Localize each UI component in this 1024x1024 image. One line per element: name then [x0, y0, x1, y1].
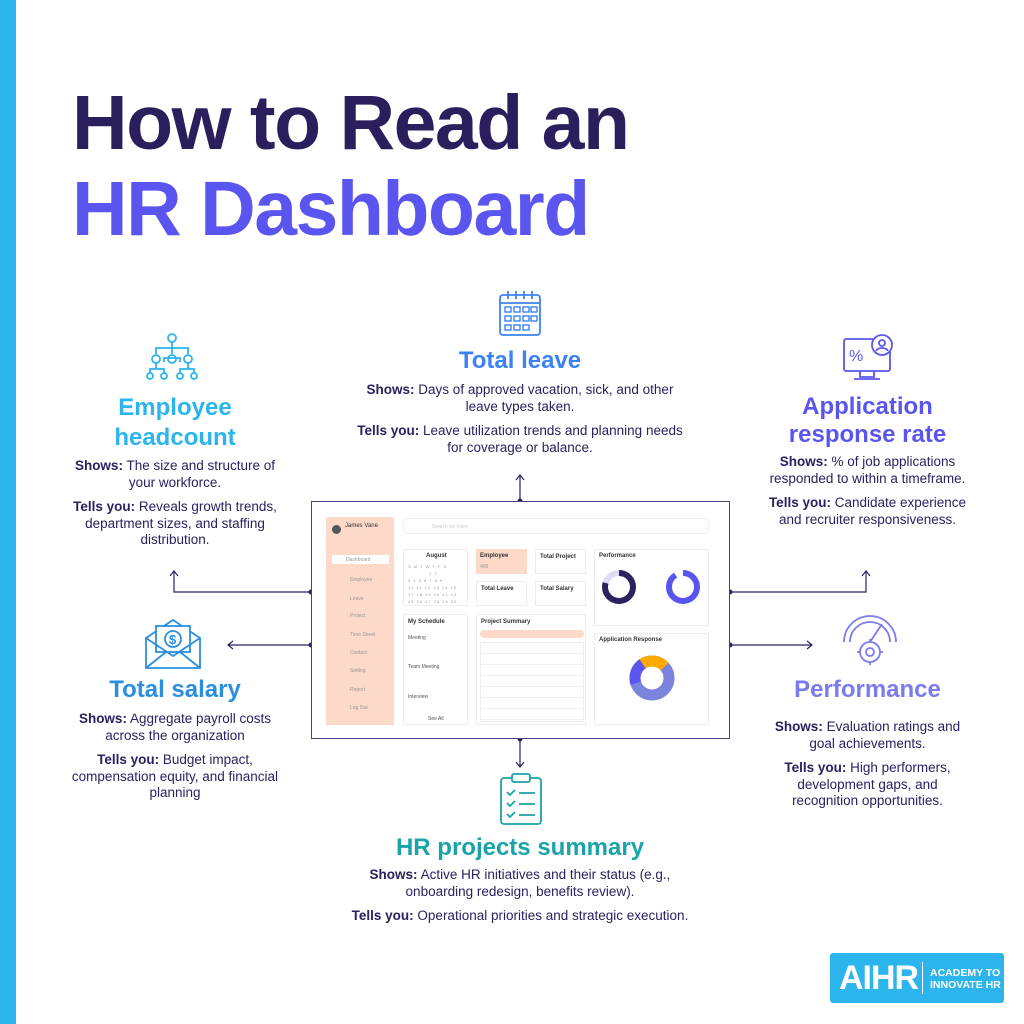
side accent bar [0, 0, 16, 1024]
heading: employee headcount: Employee [118, 394, 232, 421]
calendar: 1 2 [429, 571, 438, 576]
sidebar: Setting [350, 668, 366, 674]
sidebar: Project [350, 613, 366, 619]
stat cards [476, 549, 527, 574]
heading: employee headcount [114, 394, 236, 451]
stat cards: 400 [480, 564, 488, 570]
project summary [476, 614, 586, 725]
title: HR Dashboard [72, 166, 589, 252]
schedule: Interview [408, 694, 428, 700]
heading: employee headcount: headcount [114, 424, 236, 451]
sidebar [326, 517, 394, 725]
icon: calendar [499, 291, 541, 336]
heading: application response rate: Application [802, 393, 933, 420]
icon: monitor percent [843, 334, 893, 380]
calendar: 25 26 27 28 29 30 [408, 599, 457, 604]
dashboard mockup: Total Salary [540, 586, 574, 592]
sidebar: Leave [350, 596, 364, 602]
performance [594, 549, 709, 626]
calendar: S M T W T F S [408, 564, 447, 569]
logo: AIHR: ACADEMY TO [930, 967, 1000, 979]
calendar: 17 18 19 20 21 22 [408, 592, 457, 597]
heading: application response rate [789, 393, 946, 448]
heading: total leave: Total leave [459, 347, 581, 374]
sidebar: Dashboard [346, 557, 370, 563]
calendar: 10 11 12 13 14 15 [408, 585, 457, 590]
project summary: Project Summary [481, 619, 530, 625]
sidebar: Log Out [350, 705, 368, 711]
stat cards: Employee [480, 553, 508, 559]
dashboard mockup: Total Project [540, 554, 576, 560]
sidebar: Contact [350, 650, 367, 656]
calendar: August [426, 553, 447, 559]
heading: application response rate: response rate [789, 421, 946, 448]
schedule: My Schedule [408, 619, 445, 625]
heading: hr projects summary: HR projects summary [396, 834, 644, 861]
icon: monitor percent: % [849, 348, 863, 365]
search: Search for more [432, 524, 468, 530]
heading: total salary: Total salary [109, 676, 241, 703]
icon: salary envelope [145, 618, 201, 669]
sidebar: James Vane [345, 523, 378, 529]
search [403, 518, 709, 534]
schedule: See All [428, 716, 444, 722]
icon: salary envelope: $ [169, 632, 177, 647]
heading: performance: Performance [794, 676, 941, 703]
title: How to Read an [72, 80, 629, 166]
application response [594, 633, 709, 725]
sidebar: Time Sheet [350, 632, 375, 638]
dashboard mockup: Total Leave [481, 586, 514, 592]
performance: Performance [599, 553, 636, 559]
logo: AIHR: AIHR [839, 959, 918, 997]
dashboard mockup [311, 501, 730, 739]
text: performance: Shows: Evaluation ratings and goal achievements. Tells you: High performers, development gaps, and recognition opportunities. [775, 719, 960, 808]
schedule: Team Meeting [408, 664, 439, 670]
sidebar: Report [350, 687, 365, 693]
icon: gauge gear [843, 615, 897, 665]
icon: clipboard [500, 773, 542, 825]
calendar: 3 4 5 6 7 8 9 [408, 578, 443, 583]
text: employee headcount: Shows: The size and structure of your workforce. Tells you: Reveals growth trends, department sizes, and staffing distribution. [73, 458, 277, 547]
application response: Application Response [599, 637, 662, 643]
logo: AIHR: INNOVATE HR [930, 979, 1001, 991]
text: application response rate: Shows: % of job applications responded to within a timeframe. Tells you: Candidate experience and recruiter responsiveness. [769, 454, 966, 526]
text: hr projects summary: Shows: Active HR initiatives and their status (e.g., onboarding redesign, benefits review). Tells you: Operational priorities and strategic execution. [352, 867, 688, 923]
sidebar: Employee [350, 577, 372, 583]
text: total salary: Shows: Aggregate payroll costs across the organization Tells you: Budget impact, compensation equity, and financial planning [72, 711, 278, 800]
schedule: Meeting [408, 635, 426, 641]
title [72, 80, 629, 252]
icon: org chart [146, 333, 198, 380]
calendar [403, 549, 468, 606]
schedule [403, 614, 468, 725]
logo: AIHR [830, 953, 1004, 1003]
text: total leave: Shows: Days of approved vacation, sick, and other leave types taken. Tells you: Leave utilization trends and planning needs for coverage or balance. [357, 382, 683, 454]
